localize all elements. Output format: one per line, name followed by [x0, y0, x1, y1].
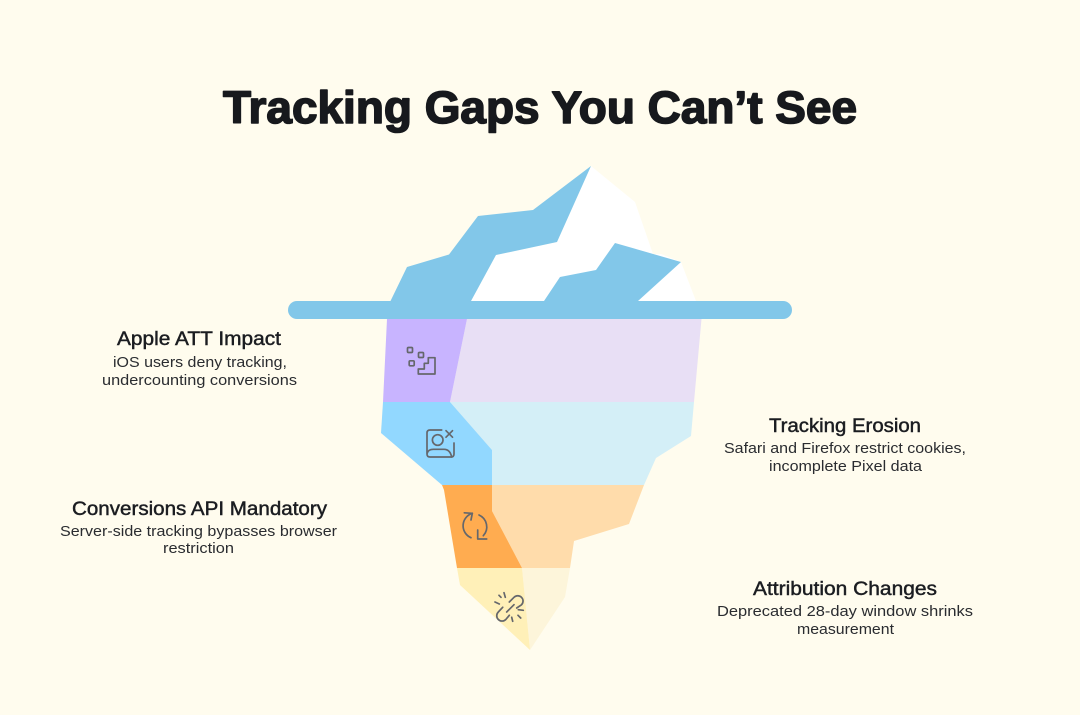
text block: Attribution Changes: Attribution Changes — [753, 579, 937, 600]
layer 4: yellow — [457, 568, 530, 650]
waterline bar — [288, 301, 792, 319]
text block: Attribution Changes: Deprecated 28-day window shrinks — [717, 603, 973, 620]
iceberg tip: right blue facet — [544, 243, 681, 301]
text block: Apple ATT Impact: undercounting conversions — [102, 372, 297, 389]
iceberg tip: white face — [471, 166, 696, 301]
icon: user blocked — [427, 430, 454, 457]
text block: Attribution Changes: measurement — [797, 621, 895, 638]
text block: Apple ATT Impact: iOS users deny tracking, — [113, 354, 287, 371]
text block: Apple ATT Impact: Apple ATT Impact — [117, 329, 282, 350]
iceberg illustration — [288, 166, 792, 650]
text block: Conversions API Mandatory: restriction — [163, 540, 234, 557]
layer 1: purple — [383, 319, 467, 402]
icon: stairs and blocks — [408, 348, 435, 374]
title: Tracking Gaps You Can’t See — [223, 82, 857, 133]
layer 3: light orange — [492, 485, 644, 568]
text block: Conversions API Mandatory: Server-side tracking bypasses browser — [60, 523, 337, 540]
text block: Conversions API Mandatory — [60, 499, 337, 557]
layer 2: light blue — [450, 402, 694, 485]
text block: Conversions API Mandatory: Conversions API Mandatory — [72, 499, 328, 520]
layer 1: light purple — [450, 319, 702, 402]
icon: sync arrows — [463, 513, 487, 539]
text block: Attribution Changes — [717, 579, 973, 638]
text block: Tracking Erosion: incomplete Pixel data — [769, 458, 923, 475]
text block: Apple ATT Impact — [102, 329, 297, 389]
layer 4: light yellow — [522, 568, 570, 650]
iceberg tip: left blue facet — [390, 166, 591, 301]
text block: Tracking Erosion — [724, 416, 966, 475]
text block: Tracking Erosion: Safari and Firefox restrict cookies, — [724, 440, 966, 457]
icon: broken link — [495, 593, 523, 621]
layer 3: orange — [442, 485, 522, 568]
text block: Tracking Erosion: Tracking Erosion — [769, 416, 921, 437]
layer 2: blue — [381, 402, 492, 485]
